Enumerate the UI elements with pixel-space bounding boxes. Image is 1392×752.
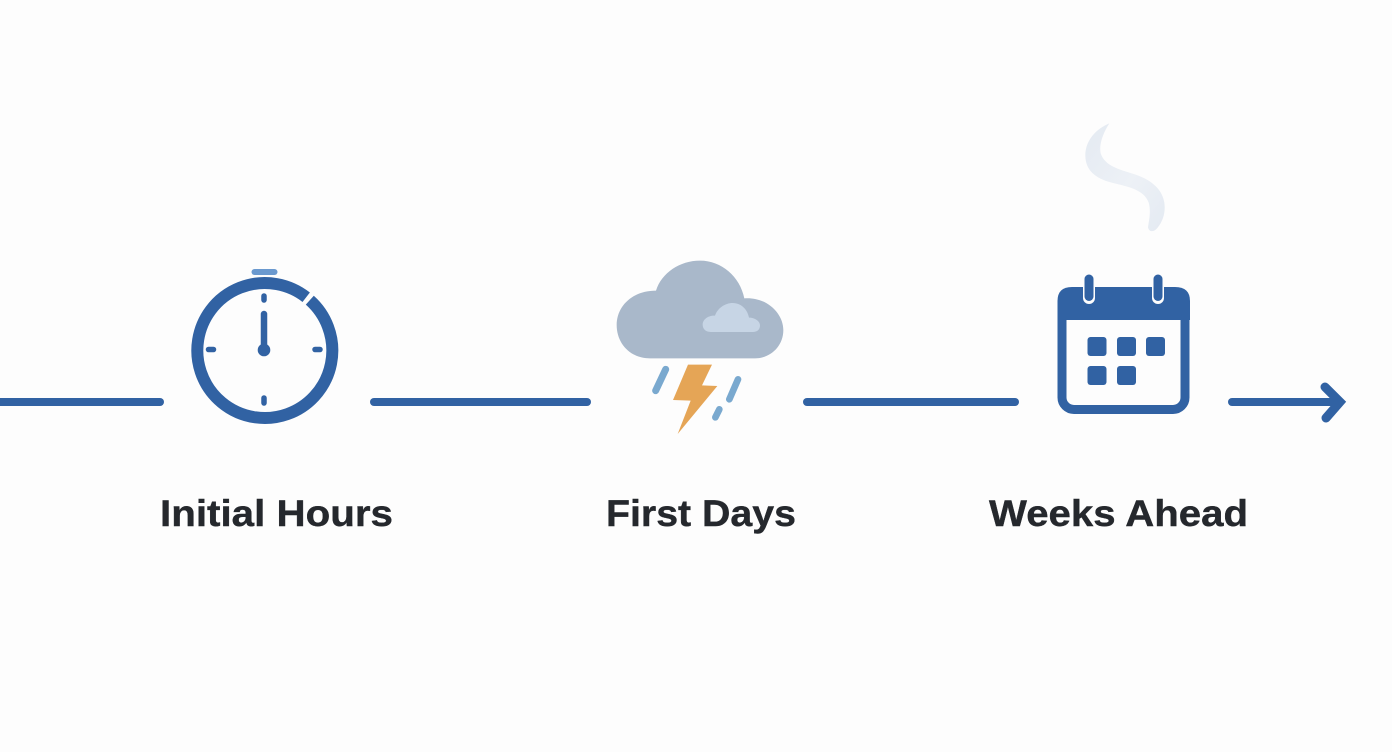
- small cloud: [703, 303, 760, 332]
- icon: storm cloud: [617, 261, 783, 434]
- icon: wisp of smoke: [1085, 123, 1165, 231]
- label: Weeks Ahead: Weeks Ahead: [989, 493, 1248, 534]
- timeline segment: clock to cloud: [374, 398, 587, 406]
- label: First Days: First Days: [606, 493, 796, 534]
- date squares: [1088, 337, 1165, 385]
- rain streaks: [656, 369, 738, 417]
- main cloud: [617, 261, 783, 358]
- timeline segment: lead-in line: [0, 398, 160, 406]
- icon: calendar: [1058, 279, 1190, 410]
- timeline segment: cloud to calendar: [807, 398, 1015, 406]
- arrow: timeline continues: [1232, 387, 1340, 418]
- lightning bolt: [673, 365, 717, 434]
- label: Initial Hours: Initial Hours: [160, 493, 393, 534]
- icon: stopwatch: [197, 269, 332, 418]
- calendar header: [1058, 287, 1190, 320]
- binder rings: [1089, 279, 1158, 298]
- calendar body: [1062, 300, 1185, 410]
